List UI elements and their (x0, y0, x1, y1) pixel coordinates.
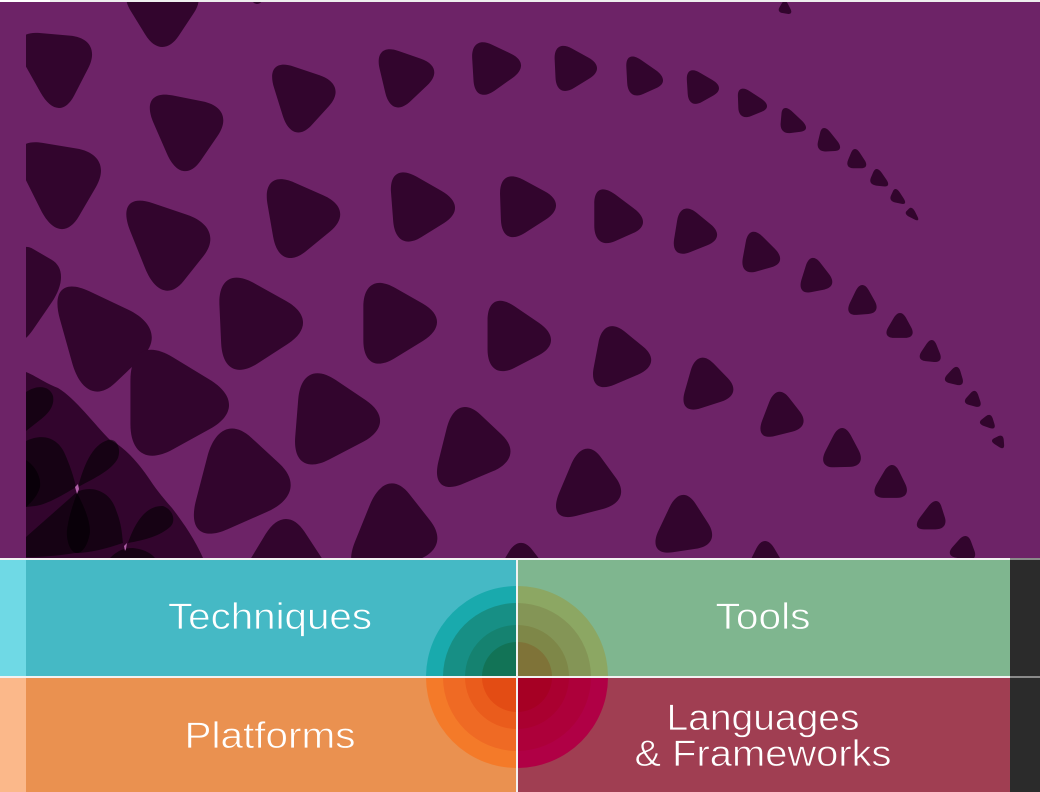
concentric rings: Languages quarter (518, 678, 608, 768)
arc 5: triangles (194, 428, 538, 558)
label: Languages and Frameworks: Languages (666, 697, 860, 738)
arc 3: triangles (26, 246, 976, 558)
panel: Tools quadrant (518, 560, 1040, 676)
panel: purple radar background (0, 0, 1040, 558)
panel: Platforms quadrant (0, 678, 516, 792)
label: Platforms: Platforms (184, 715, 356, 756)
arc 4: triangles (130, 350, 780, 558)
panel: Languages and Frameworks quadrant (518, 678, 1040, 792)
arc 1: outermost triangles (16, 0, 924, 221)
label: Languages and Frameworks: & Frameworks (634, 733, 892, 774)
label: Tools: Tools (716, 596, 810, 637)
label: Techniques: Techniques (168, 596, 372, 637)
arc 2: triangles (26, 142, 1004, 448)
panel: Techniques quadrant (0, 560, 516, 676)
label: Languages and Frameworks (634, 697, 892, 774)
overlapping blob cluster at radar centre (26, 372, 203, 558)
concentric rings: Platforms quarter (426, 678, 516, 768)
radar pattern: triangle arcs (12, 0, 1013, 594)
concentric rings: Techniques quarter (426, 586, 516, 676)
concentric rings: Tools quarter (518, 586, 608, 676)
